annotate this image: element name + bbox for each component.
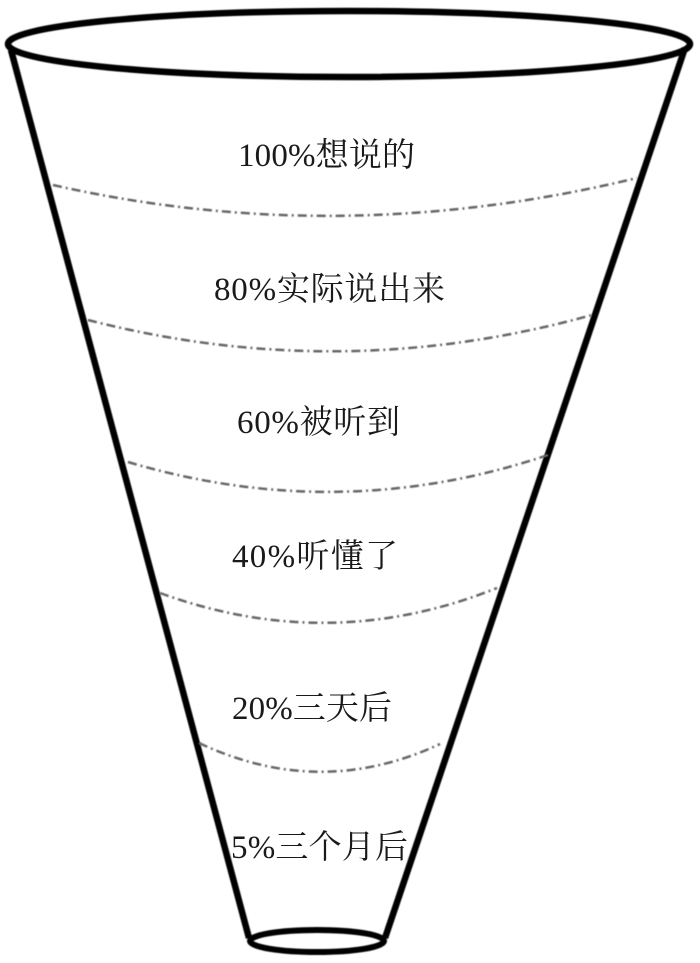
funnel right side (385, 48, 685, 938)
label: 100%: 100%想说的 (238, 137, 415, 174)
label: 40%: 40%听懂了 (232, 538, 398, 575)
label: 20%: 20%三天后 (232, 690, 392, 727)
label: 5%: 5%三个月后 (231, 829, 408, 866)
level dividers (53, 178, 637, 772)
label: 60%: 60%被听到 (237, 404, 400, 441)
funnel left side (11, 50, 249, 938)
label: 80%: 80%实际说出来 (214, 271, 445, 308)
funnel top rim (8, 11, 690, 77)
funnel bottom rim (250, 930, 384, 952)
